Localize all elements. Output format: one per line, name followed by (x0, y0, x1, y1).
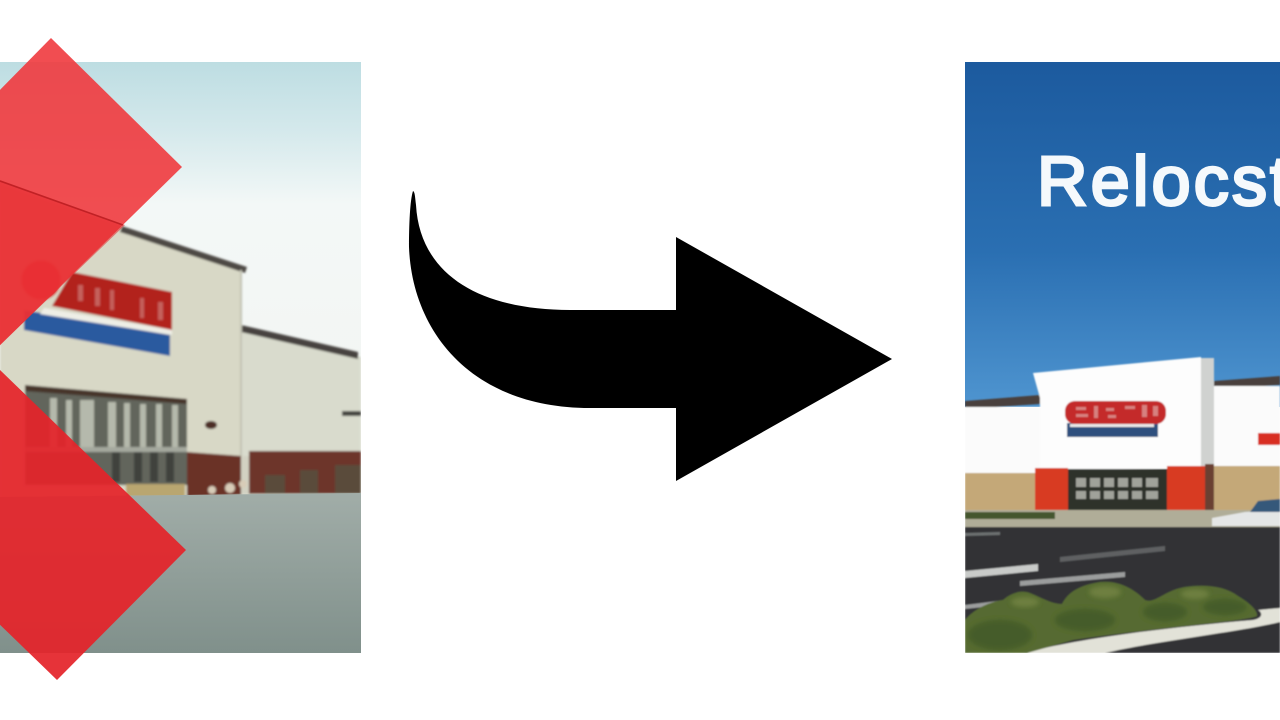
curb (1025, 608, 1280, 653)
red X: upper diamond (0, 38, 182, 355)
photo: old store with red X (0, 38, 361, 680)
shrubs (965, 582, 1257, 653)
red X: lower diamond (0, 362, 186, 680)
arrow: curved right arrow (409, 191, 892, 481)
photo: new store with Relocate title (965, 62, 1280, 653)
